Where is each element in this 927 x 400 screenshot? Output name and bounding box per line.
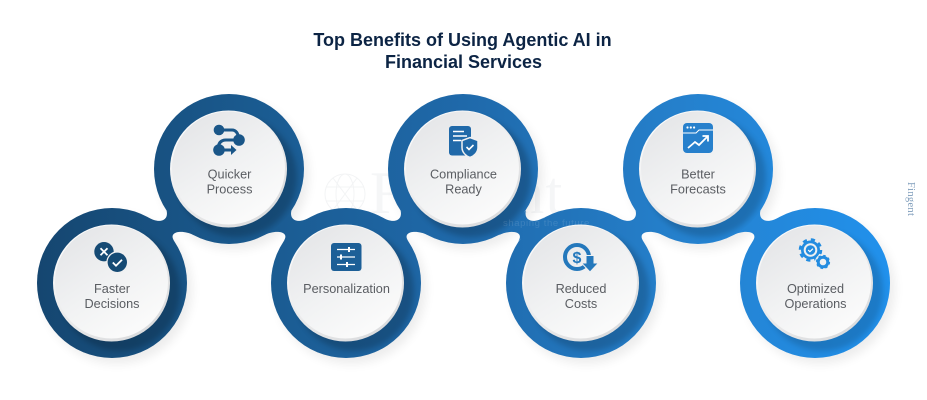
watermark tagline: shaping the future <box>503 218 590 229</box>
chain of connected rings <box>37 94 890 358</box>
title <box>313 30 612 72</box>
panel: faster decisions <box>53 224 180 351</box>
icon: sliders <box>331 243 362 271</box>
icon: gears with check <box>800 240 831 270</box>
icon: document with shield <box>449 126 478 158</box>
label: better forecasts: Forecasts <box>670 182 726 196</box>
icon: x and check circles <box>94 242 128 273</box>
label: quicker process: Quicker <box>208 168 251 182</box>
panel: optimized operations <box>756 224 883 351</box>
panel: better forecasts <box>639 110 766 237</box>
panel: personalization <box>287 224 414 351</box>
label: personalization: Personalization <box>303 282 390 296</box>
watermark logo: Fingent <box>370 160 564 226</box>
label: reduced costs: Reduced <box>556 282 606 296</box>
vertical brand label: Fingent <box>905 182 916 216</box>
label: better forecasts: Better <box>681 168 715 182</box>
label: compliance ready: Compliance <box>430 168 497 182</box>
panel: quicker process <box>170 110 297 237</box>
label: compliance ready: Ready <box>445 182 482 196</box>
panel: reduced costs <box>522 224 649 351</box>
title: Financial Services <box>385 52 542 72</box>
label: quicker process: Process <box>207 182 252 196</box>
panel: compliance ready <box>404 110 531 237</box>
label: reduced costs: Costs <box>565 297 597 311</box>
icon: process flow <box>213 125 245 156</box>
icon: dollar with down arrow: $ <box>573 250 582 267</box>
label: faster decisions: Faster <box>94 282 130 296</box>
outer soft shadows <box>42 100 895 364</box>
icon: browser with growth chart <box>683 123 713 153</box>
label: faster decisions: Decisions <box>84 297 140 311</box>
label: optimized operations: Optimized <box>787 282 844 296</box>
label: optimized operations: Operations <box>784 297 847 311</box>
title: Top Benefits of Using Agentic AI in <box>313 30 612 50</box>
